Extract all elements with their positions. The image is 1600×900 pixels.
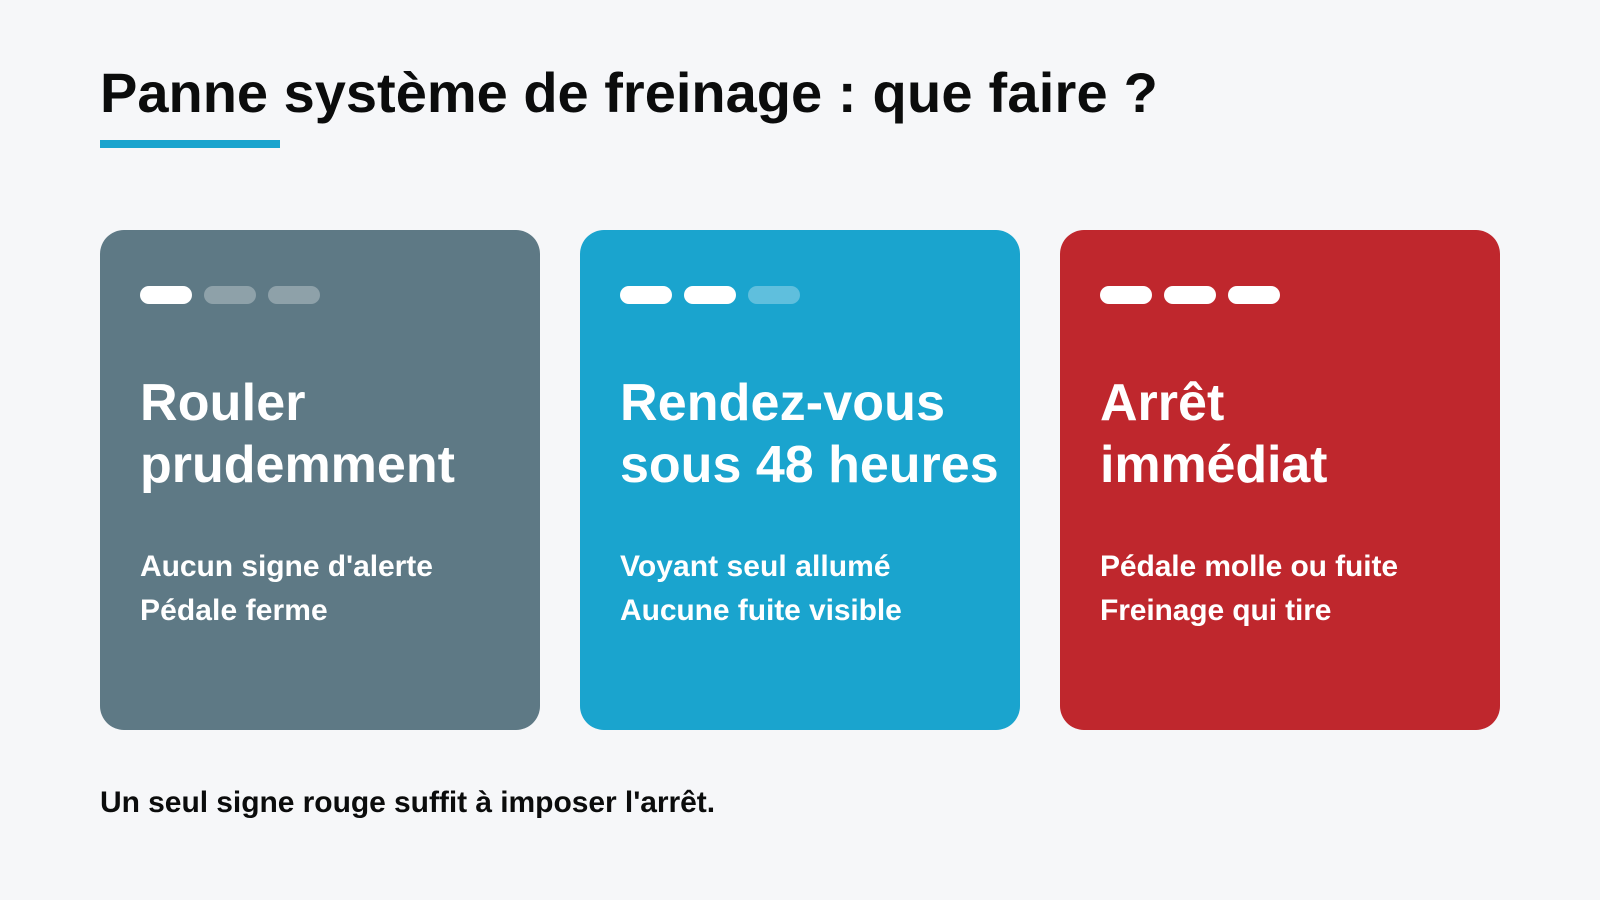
severity indicator: 2 of 3 (620, 286, 800, 304)
card heading (1100, 374, 1327, 494)
card text (1100, 550, 1398, 627)
card heading: Arrêt (1100, 374, 1224, 432)
card heading (620, 374, 999, 494)
title: Panne système de freinage : que faire ? (100, 61, 1158, 124)
panel: arrêt immédiat (1060, 230, 1500, 730)
card heading: sous 48 heures (620, 436, 999, 494)
severity indicator: 1 of 3 (140, 286, 320, 304)
card text: Freinage qui tire (1100, 594, 1331, 627)
card heading (140, 374, 455, 494)
card text: Aucune fuite visible (620, 594, 902, 627)
card heading: Rouler (140, 374, 306, 432)
card text (140, 550, 433, 627)
severity indicator: 3 of 3 (1100, 286, 1280, 304)
card text (620, 550, 902, 627)
footer note: Un seul signe rouge suffit à imposer l'arrêt. (100, 786, 715, 819)
card heading: Rendez-vous (620, 374, 945, 432)
card text: Pédale ferme (140, 594, 328, 627)
card heading: prudemment (140, 436, 455, 494)
card text: Pédale molle ou fuite (1100, 550, 1398, 583)
card text: Voyant seul allumé (620, 550, 891, 583)
card text: Aucun signe d'alerte (140, 550, 433, 583)
title underline (100, 140, 280, 148)
panel: rouler prudemment (100, 230, 540, 730)
panel: rendez-vous sous 48 heures (580, 230, 1020, 730)
card heading: immédiat (1100, 436, 1327, 494)
